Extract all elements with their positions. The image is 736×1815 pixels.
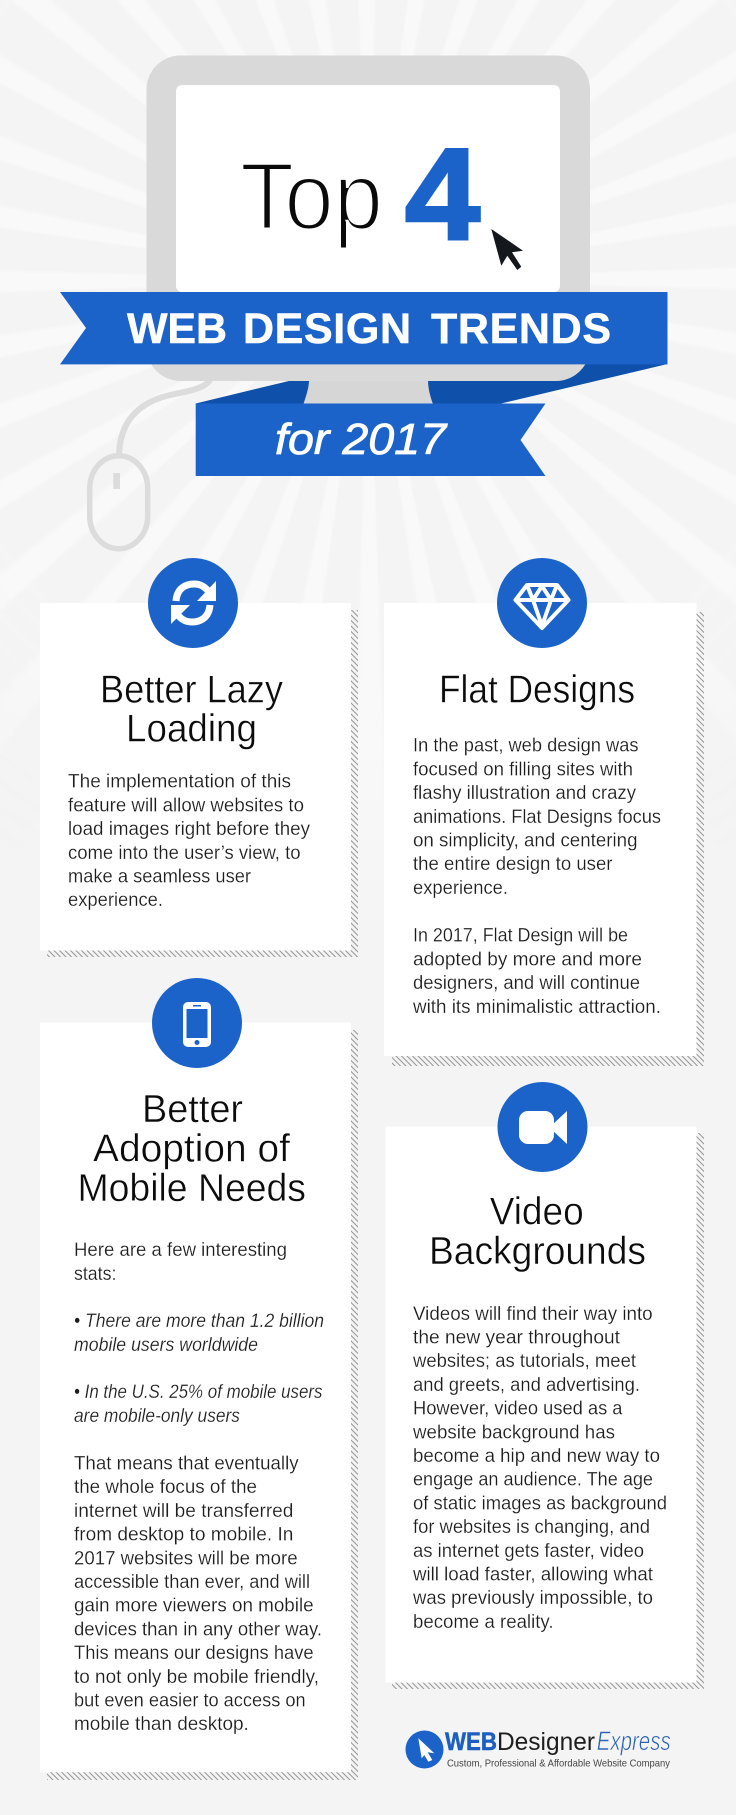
text block: flat designs description: adopted by more and more: [413, 948, 642, 970]
text block: video backgrounds description: will load faster, allowing what: [412, 1564, 654, 1586]
text block: lazy loading description: feature will allow websites to: [68, 794, 304, 816]
heading: video backgrounds: [429, 1191, 646, 1273]
text block: video backgrounds description: websites; as tutorials, meet: [412, 1350, 637, 1372]
ribbon: web design trends: TRENDS: [431, 305, 611, 353]
text block: mobile stats: Here are a few interesting: [74, 1239, 287, 1261]
text block: flat designs description: flashy illustration and crazy: [413, 782, 636, 804]
ribbon fold: dark band behind monitor: [196, 364, 667, 404]
text block: mobile conclusion: internet will be transferred: [74, 1500, 293, 1522]
heading: better lazy loading: Loading: [126, 708, 257, 751]
text block: flat designs description: the entire design to user: [413, 853, 613, 875]
text block: mobile conclusion: the whole focus of the: [74, 1476, 257, 1498]
text block: video backgrounds description: website background has: [412, 1421, 615, 1443]
text block: mobile conclusion: but even easier to access on: [74, 1690, 306, 1712]
panel: flat designs: [384, 558, 704, 1066]
text block: mobile stats: are mobile-only users: [74, 1405, 240, 1427]
text block: flat designs description: [412, 735, 661, 1018]
text block: lazy loading description: experience.: [68, 889, 163, 911]
illustration: computer mouse with cord: [90, 380, 210, 549]
heading: better lazy loading: Better Lazy: [100, 669, 283, 712]
icon: diamond in blue circle: [497, 558, 587, 648]
text block: mobile conclusion: 2017 websites will be more: [74, 1547, 298, 1569]
text block: lazy loading description: load images right before they: [68, 818, 310, 840]
text block: mobile conclusion: mobile than desktop.: [74, 1713, 249, 1735]
text block: video backgrounds description: the new year throughout: [413, 1326, 621, 1348]
ribbon: for 2017: [196, 404, 545, 476]
logo: web designer express: WEB: [445, 1728, 497, 1756]
panel: better adoption of mobile needs: [40, 978, 358, 1780]
icon: smartphone in blue circle: [152, 978, 242, 1068]
ribbon: for 2017: for 2017: [275, 415, 448, 464]
text block: mobile conclusion: accessible than ever, and will: [74, 1571, 310, 1593]
heading: better adoption of mobile needs: Better: [142, 1088, 243, 1131]
text block: video backgrounds description: become a hip and new way to: [413, 1445, 660, 1467]
text block: mobile stats: [74, 1239, 324, 1427]
title: Top 4: 4: [405, 121, 480, 267]
text block: flat designs description: on simplicity, and centering: [413, 830, 638, 852]
heading: better adoption of mobile needs: Adoption of: [93, 1128, 290, 1171]
heading: better lazy loading: [100, 669, 283, 751]
title: Top 4: [240, 121, 480, 267]
text block: mobile conclusion: This means our designs have: [74, 1642, 314, 1664]
heading: flat designs: Flat Designs: [439, 669, 635, 712]
icon: refresh arrows in blue circle: [148, 558, 238, 648]
title: Top 4: Top: [240, 143, 383, 250]
text block: video backgrounds description: engage an audience. The age: [413, 1469, 653, 1491]
text block: flat designs description: animations. Flat Designs focus: [413, 806, 661, 828]
heading: better adoption of mobile needs: Mobile Needs: [78, 1167, 306, 1210]
text block: flat designs description: experience.: [413, 877, 508, 899]
text block: lazy loading description: The implementation of this: [68, 771, 291, 793]
illustration: monitor: [146, 56, 590, 404]
icon: video camera in blue circle: [498, 1082, 588, 1172]
text block: mobile conclusion: That means that eventually: [74, 1452, 299, 1474]
text block: mobile conclusion: gain more viewers on mobile: [74, 1595, 314, 1617]
text block: mobile stats: stats:: [74, 1263, 116, 1285]
heading: better adoption of mobile needs: [78, 1088, 306, 1210]
text block: video backgrounds description: for websites is changing, and: [413, 1516, 650, 1538]
ribbon: web design trends: DESIGN: [243, 305, 411, 353]
text block: video backgrounds description: [412, 1303, 667, 1633]
text block: mobile stats: • There are more than 1.2 billion: [74, 1310, 324, 1332]
text block: flat designs description: designers, and will continue: [413, 972, 640, 994]
logo: web designer express: Designer: [497, 1728, 595, 1756]
icon: mouse cursor: [491, 229, 523, 270]
text block: lazy loading description: come into the user’s view, to: [68, 842, 301, 864]
ribbon: web design trends: [60, 292, 668, 364]
text block: lazy loading description: [68, 771, 310, 911]
text block: video backgrounds description: was previously impossible, to: [412, 1587, 653, 1609]
heading: video backgrounds: Video: [490, 1191, 584, 1234]
text block: video backgrounds description: of static images as background: [413, 1492, 667, 1514]
logo: web designer express: Express: [597, 1726, 671, 1756]
text block: flat designs description: In 2017, Flat Design will be: [413, 925, 628, 947]
text block: mobile conclusion: to not only be mobile friendly,: [74, 1666, 319, 1688]
text block: video backgrounds description: become a reality.: [413, 1611, 554, 1633]
panel: video backgrounds: [386, 1082, 704, 1689]
logo: web designer express: Custom, Professional & Affordable Website Company: [447, 1758, 671, 1770]
text block: video backgrounds description: Videos will find their way into: [413, 1303, 653, 1325]
text block: video backgrounds description: However, video used as a: [413, 1398, 623, 1420]
text block: flat designs description: with its minimalistic attraction.: [412, 996, 661, 1018]
text block: flat designs description: In the past, web design was: [413, 735, 639, 757]
text block: mobile stats: • In the U.S. 25% of mobile users: [74, 1381, 323, 1403]
text block: mobile conclusion: [74, 1452, 322, 1735]
logo: web designer express: [406, 1726, 671, 1770]
text block: lazy loading description: make a seamless user: [68, 866, 251, 888]
text block: video backgrounds description: as internet gets faster, video: [413, 1540, 644, 1562]
text block: video backgrounds description: and greets, and advertising.: [413, 1374, 640, 1396]
text block: mobile stats: mobile users worldwide: [74, 1334, 258, 1356]
panel: better lazy loading: [40, 558, 358, 957]
text block: mobile conclusion: from desktop to mobile. In: [74, 1524, 293, 1546]
ribbon: web design trends: WEB: [127, 305, 227, 353]
text block: mobile conclusion: devices than in any other way.: [74, 1618, 322, 1640]
text block: flat designs description: focused on filling sites with: [413, 758, 633, 780]
heading: video backgrounds: Backgrounds: [429, 1230, 646, 1273]
